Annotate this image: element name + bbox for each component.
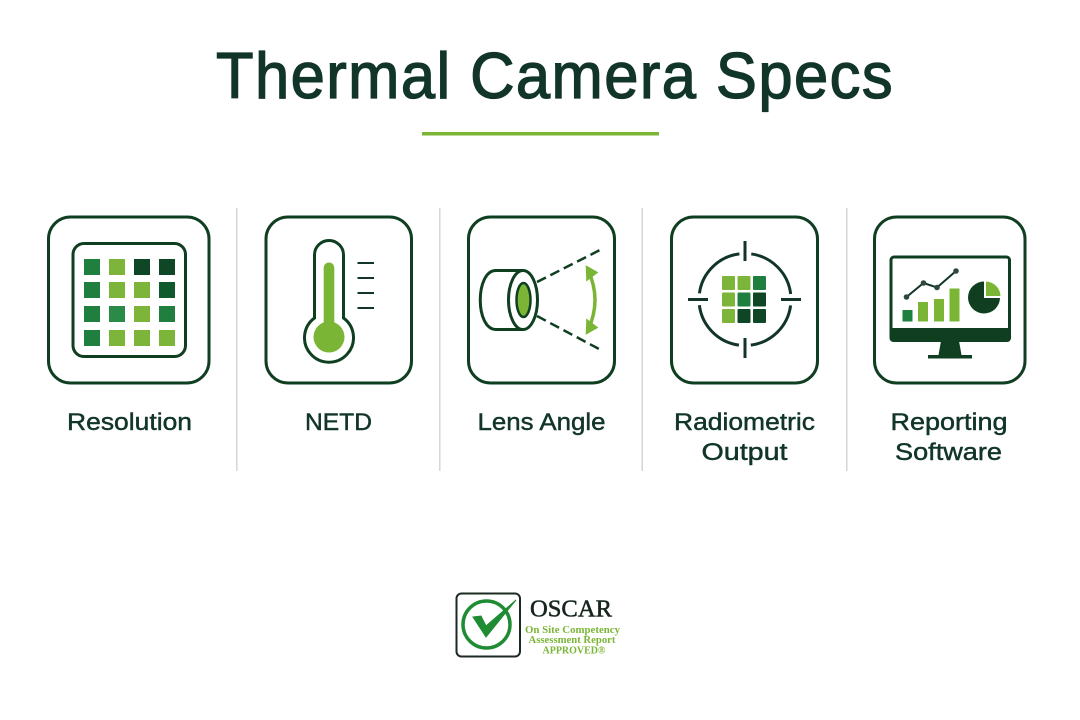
label: resolution: Resolution bbox=[67, 409, 192, 436]
icon frame: lens angle bbox=[468, 217, 614, 383]
label: NETD: NETD bbox=[305, 409, 372, 436]
icon frame: NETD bbox=[266, 217, 412, 383]
OSCAR logo bbox=[456, 594, 620, 656]
icon: monitor dashboard bbox=[890, 257, 1011, 358]
title: Thermal Camera Specs bbox=[216, 39, 894, 112]
panel: resolution bbox=[48, 217, 209, 436]
icon frame: reporting software bbox=[874, 217, 1025, 383]
logo tagline: On Site Competency bbox=[525, 625, 620, 636]
panel: reporting software bbox=[874, 217, 1025, 466]
icon frame: resolution bbox=[48, 217, 209, 383]
logo badge bbox=[456, 594, 520, 656]
logo tagline: Assessment Report bbox=[528, 635, 616, 646]
title underline bbox=[422, 132, 659, 136]
panel: radiometric output: Output bbox=[702, 439, 788, 466]
label: lens angle: Lens Angle bbox=[478, 409, 606, 436]
label: reporting software: Reporting bbox=[890, 409, 1008, 436]
label: radiometric output: Radiometric bbox=[674, 409, 815, 436]
icon: lens bbox=[480, 250, 600, 349]
logo tagline bbox=[525, 625, 620, 656]
icon frame: radiometric output bbox=[672, 217, 818, 383]
panel: radiometric output bbox=[672, 217, 818, 466]
logo tagline: APPROVED® bbox=[542, 646, 606, 656]
panel: NETD bbox=[266, 217, 412, 436]
logo wordmark: OSCAR bbox=[530, 596, 612, 622]
icon: pixel grid bbox=[73, 244, 186, 356]
panel: reporting software: Software bbox=[895, 439, 1002, 466]
panel: lens angle bbox=[468, 217, 614, 436]
icon: thermometer bbox=[304, 240, 374, 362]
icon: crosshair grid bbox=[688, 241, 801, 358]
